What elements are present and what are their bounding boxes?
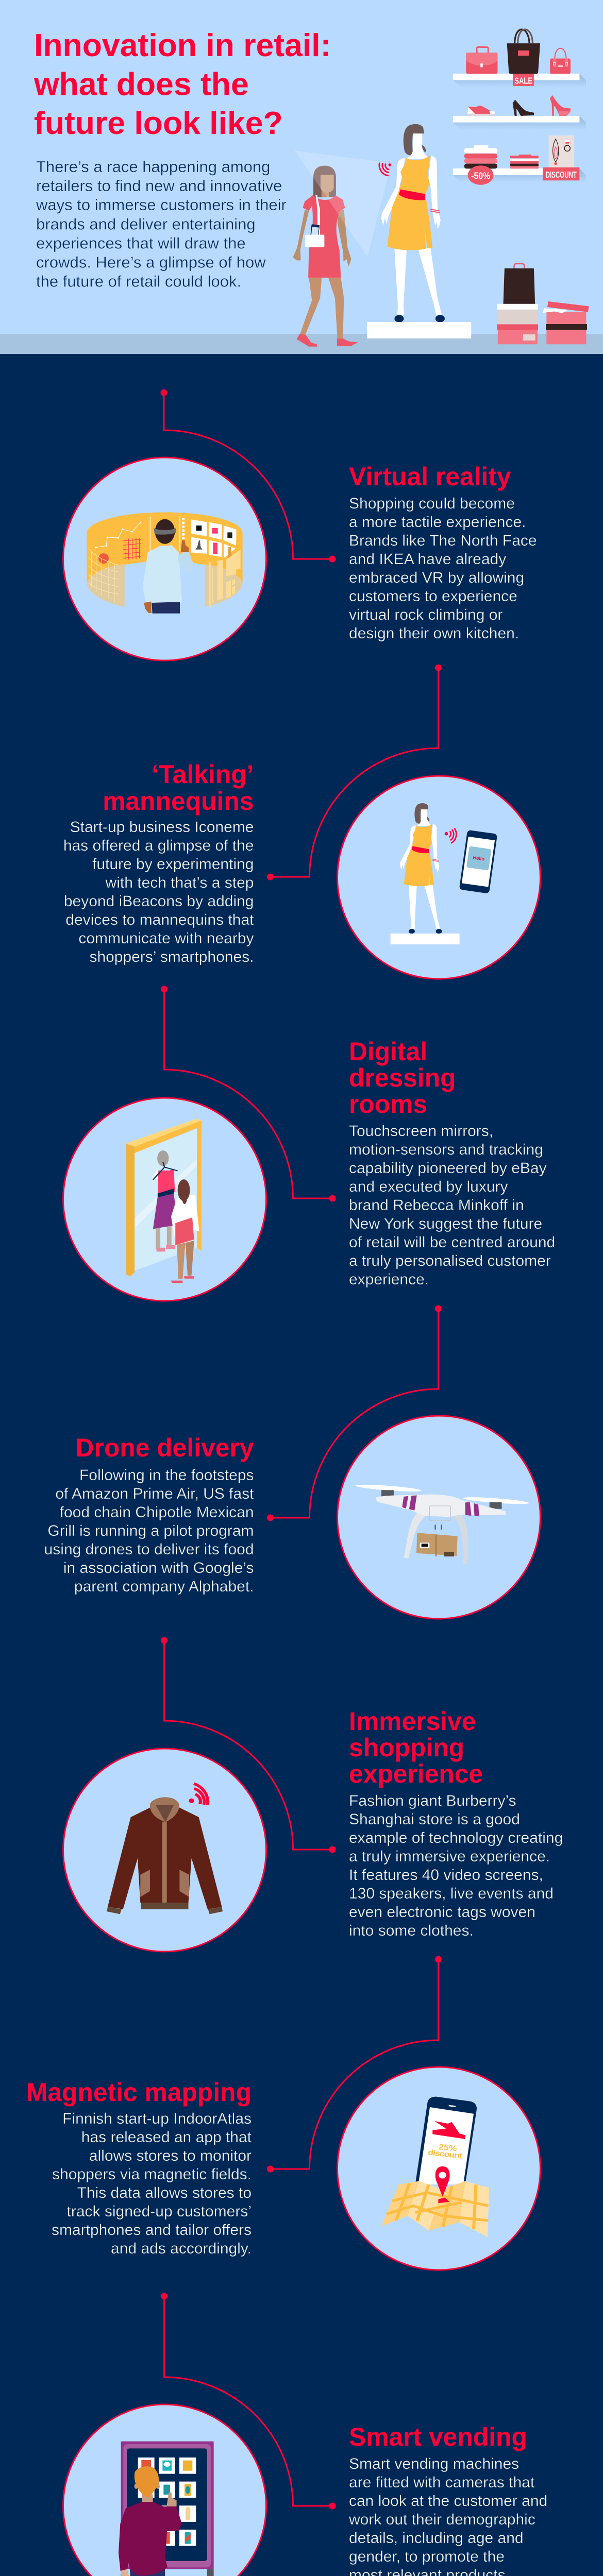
text: digital dressing rooms: and executed by luxury: [349, 1178, 508, 1195]
text: virtual reality: embraced VR by allowing: [349, 569, 524, 586]
connector line: [270, 1309, 438, 1518]
icon: shopping bag: [504, 264, 535, 304]
heading: immersive shopping experience: [349, 1707, 483, 1788]
section: drone delivery: [44, 1306, 540, 1619]
connector end dot: [329, 555, 336, 563]
illustration circle: VR wraparound screen: [63, 457, 266, 660]
text: magnetic mapping: allows stores to monitor: [89, 2147, 252, 2164]
text: digital dressing rooms: a truly personalised customer: [349, 1252, 551, 1269]
discount tag: DISCOUNT: [546, 170, 577, 180]
text: magnetic mapping: has released an app that: [81, 2129, 252, 2146]
heading: magnetic mapping: Magnetic mapping: [26, 2078, 252, 2107]
section: digital dressing rooms: [63, 986, 555, 1301]
icon: briefcase: [466, 47, 497, 74]
heading: digital dressing rooms: [349, 1037, 456, 1118]
text: virtual reality: virtual rock climbing or: [349, 606, 502, 623]
text: drone delivery: Grill is running a pilot program: [47, 1522, 254, 1539]
heading: virtual reality: Virtual reality: [349, 462, 511, 491]
text: drone delivery: using drones to deliver its food: [44, 1541, 254, 1558]
illustration: man at smart vending machine: [119, 2442, 214, 2576]
text: immersive shopping experience: into some clothes.: [349, 1922, 474, 1939]
heading: drone delivery: Drone delivery: [76, 1433, 254, 1462]
text: immersive shopping experience: even electronic tags woven: [349, 1904, 535, 1921]
beam of light: [295, 150, 390, 257]
connector end dot: [329, 1195, 336, 1201]
connector line: [164, 989, 332, 1198]
text: virtual reality: customers to experience: [349, 588, 517, 605]
intro text: crowds. Here’s a glimpse of how: [36, 253, 266, 271]
illustration: man using VR headset: [87, 512, 243, 614]
text: digital dressing rooms: brand Rebecca Minkoff in: [349, 1197, 524, 1214]
heading: immersive shopping experience: shopping: [349, 1733, 464, 1762]
text: virtual reality: and IKEA have already: [349, 551, 506, 568]
icon: black heel: [513, 99, 534, 116]
text: virtual reality: Shopping could become: [349, 495, 515, 512]
text: drone delivery: [44, 1467, 254, 1595]
text: magnetic mapping: track signed-up customers’: [67, 2203, 252, 2220]
heading: immersive shopping experience: Immersive: [349, 1707, 476, 1736]
illustration circle: phone and map: [337, 2067, 540, 2270]
text: talking mannequins: beyond iBeacons by adding: [64, 893, 254, 910]
discount tag: [543, 167, 579, 180]
connector line: [164, 1640, 332, 1850]
text: smart vending: [348, 2455, 547, 2576]
section: virtual reality: [63, 389, 537, 660]
text: virtual reality: design their own kitchen.: [349, 625, 519, 642]
title: future look like?: [34, 105, 283, 141]
illustration circle: drone: [337, 1416, 540, 1619]
heading: talking mannequins: [103, 760, 254, 816]
text: talking mannequins: shoppers’ smartphones.: [89, 948, 254, 965]
text: smart vending: details, including age and: [349, 2530, 524, 2547]
discount badge: minus 50 percent: -50%: [471, 170, 490, 181]
connector start dot: [435, 665, 442, 671]
sale tag: SALE: [514, 75, 532, 86]
folded clothes: [464, 145, 497, 168]
text: talking mannequins: devices to mannequins that: [65, 911, 254, 928]
icon: black tote bag: [507, 29, 540, 74]
text: immersive shopping experience: [349, 1792, 563, 1939]
illustration: mannequin on plinth: [367, 124, 471, 338]
connector line: [270, 1959, 438, 2169]
connector start dot: [161, 986, 167, 992]
icon: phone with hello message: [459, 830, 497, 893]
text: talking mannequins: has offered a glimpse of the: [63, 837, 254, 854]
section: talking mannequins: [63, 665, 540, 979]
intro text: There’s a race happening among: [36, 158, 270, 176]
text: immersive shopping experience: a truly immersive experience.: [349, 1848, 550, 1865]
text: digital dressing rooms: capability pioneered by eBay: [349, 1160, 547, 1177]
intro text: retailers to find new and innovative: [36, 177, 282, 195]
illustration: mannequin sending message to phone: [391, 803, 497, 944]
text: digital dressing rooms: motion-sensors and tracking: [349, 1141, 543, 1158]
text: talking mannequins: future by experimenting: [92, 856, 254, 873]
text: talking mannequins: [63, 819, 254, 965]
illustration: drone carrying parcel: [355, 1483, 529, 1564]
illustration circle: mannequin and phone: [337, 776, 540, 979]
text: immersive shopping experience: example of technology creating: [349, 1829, 563, 1846]
heading: digital dressing rooms: Digital: [349, 1037, 427, 1066]
connector line: [270, 668, 438, 877]
icon: wifi signal: [379, 163, 391, 176]
text: talking mannequins: Start-up business Iconeme: [70, 819, 254, 836]
shopper figure: [293, 166, 358, 347]
title: what does the: [34, 66, 249, 103]
heading: digital dressing rooms: rooms: [349, 1090, 427, 1118]
jewellery display: [549, 135, 574, 168]
text: digital dressing rooms: of retail will be centred around: [349, 1234, 555, 1251]
text: virtual reality: [349, 495, 537, 642]
icon: handbag: [550, 48, 571, 74]
text: drone delivery: parent company Alphabet.: [74, 1578, 254, 1595]
heading: smart vending: Smart vending: [349, 2422, 527, 2451]
connector line: [164, 2296, 332, 2506]
illustration: woman at digital mirror: [126, 1119, 202, 1283]
icon: wifi signal: [189, 1784, 208, 1805]
text: magnetic mapping: [52, 2110, 252, 2257]
connector end dot: [329, 1846, 336, 1853]
illustration: store shelves and products: [293, 29, 589, 347]
title: Innovation in retail:: [34, 27, 331, 63]
text: immersive shopping experience: Shanghai store is a good: [349, 1811, 520, 1828]
intro text: brands and deliver entertaining: [36, 215, 256, 233]
connector start dot: [161, 389, 167, 396]
text: digital dressing rooms: New York suggest the future: [349, 1215, 542, 1232]
section: immersive shopping experience: [63, 1637, 563, 1952]
heading: talking mannequins: mannequins: [103, 787, 254, 816]
text: drone delivery: in association with Google’s: [63, 1560, 254, 1577]
text: digital dressing rooms: [349, 1123, 555, 1288]
illustration circle: vending machine: [63, 2404, 266, 2576]
text: smart vending: gender, to promote the: [349, 2548, 505, 2565]
connector end dot: [267, 2166, 274, 2172]
illustration: phone offer above store map: discount: [427, 2148, 463, 2160]
connector end dot: [267, 1515, 274, 1521]
text: talking mannequins: communicate with nearby: [78, 930, 254, 947]
text: magnetic mapping: shoppers via magnetic fields.: [52, 2166, 252, 2183]
text: magnetic mapping: This data allows stores to: [77, 2184, 252, 2201]
heading: immersive shopping experience: experience: [349, 1759, 483, 1788]
text: smart vending: can look at the customer and: [349, 2493, 547, 2510]
text: virtual reality: Brands like The North Face: [349, 532, 537, 549]
section: smart vending: [63, 2293, 547, 2576]
text: magnetic mapping: and ads accordingly.: [111, 2240, 252, 2257]
section: magnetic mapping: [26, 1956, 540, 2270]
icon: sneaker: [467, 106, 495, 116]
illustration: jacket with electronic tag: [107, 1784, 223, 1914]
folded clothes small: [510, 155, 539, 168]
discount badge: minus 50 percent: [468, 165, 494, 185]
connector end dot: [329, 2503, 336, 2509]
text: talking mannequins: with tech that’s a step: [105, 874, 254, 891]
text: digital dressing rooms: Touchscreen mirrors,: [349, 1123, 493, 1140]
icon: red heel: [550, 95, 571, 116]
text: virtual reality: a more tactile experience.: [349, 514, 526, 531]
header panel: [0, 0, 603, 354]
heading: talking mannequins: ‘Talking’: [152, 760, 254, 789]
illustration circle: connected jacket: [63, 1749, 266, 1952]
intro text: ways to immerse customers in their: [36, 196, 287, 214]
text: immersive shopping experience: Fashion giant Burberry’s: [349, 1792, 516, 1809]
connector start dot: [161, 1637, 167, 1643]
sale tag: [513, 74, 534, 86]
text: immersive shopping experience: 130 speakers, live events and: [349, 1885, 554, 1902]
connector start dot: [435, 1956, 442, 1963]
connector start dot: [435, 1306, 442, 1312]
intro text: the future of retail could look.: [36, 272, 241, 291]
text: magnetic mapping: Finnish start-up IndoorAtlas: [62, 2110, 252, 2127]
title: [34, 27, 331, 141]
connector end dot: [267, 874, 274, 880]
gift box left: [497, 304, 538, 344]
illustration: phone offer above store map: 25%: [438, 2142, 458, 2153]
text: magnetic mapping: smartphones and tailor offers: [52, 2222, 252, 2239]
illustration: phone offer above store map: [381, 2097, 489, 2237]
connector start dot: [161, 2293, 167, 2300]
intro text: [36, 158, 287, 291]
icon: wifi signal: [445, 828, 456, 843]
connector line: [164, 393, 332, 559]
text: drone delivery: of Amazon Prime Air, US fast: [55, 1485, 254, 1502]
gift box right: [542, 301, 589, 344]
text: smart vending: Smart vending machines: [349, 2455, 519, 2472]
intro text: experiences that will draw the: [36, 234, 246, 252]
text: digital dressing rooms: experience.: [349, 1271, 429, 1288]
text: immersive shopping experience: It features 40 video screens,: [349, 1867, 543, 1884]
shelves: [453, 74, 586, 182]
text: smart vending: are fitted with cameras that: [349, 2474, 535, 2491]
text: drone delivery: food chain Chipotle Mexican: [60, 1504, 254, 1521]
text: drone delivery: Following in the footsteps: [79, 1467, 254, 1484]
icon: phone with hello message: Hello: [473, 855, 485, 862]
heading: digital dressing rooms: dressing: [349, 1063, 456, 1092]
illustration circle: smart mirror: [63, 1098, 266, 1301]
text: smart vending: work out their demographic: [348, 2511, 535, 2528]
